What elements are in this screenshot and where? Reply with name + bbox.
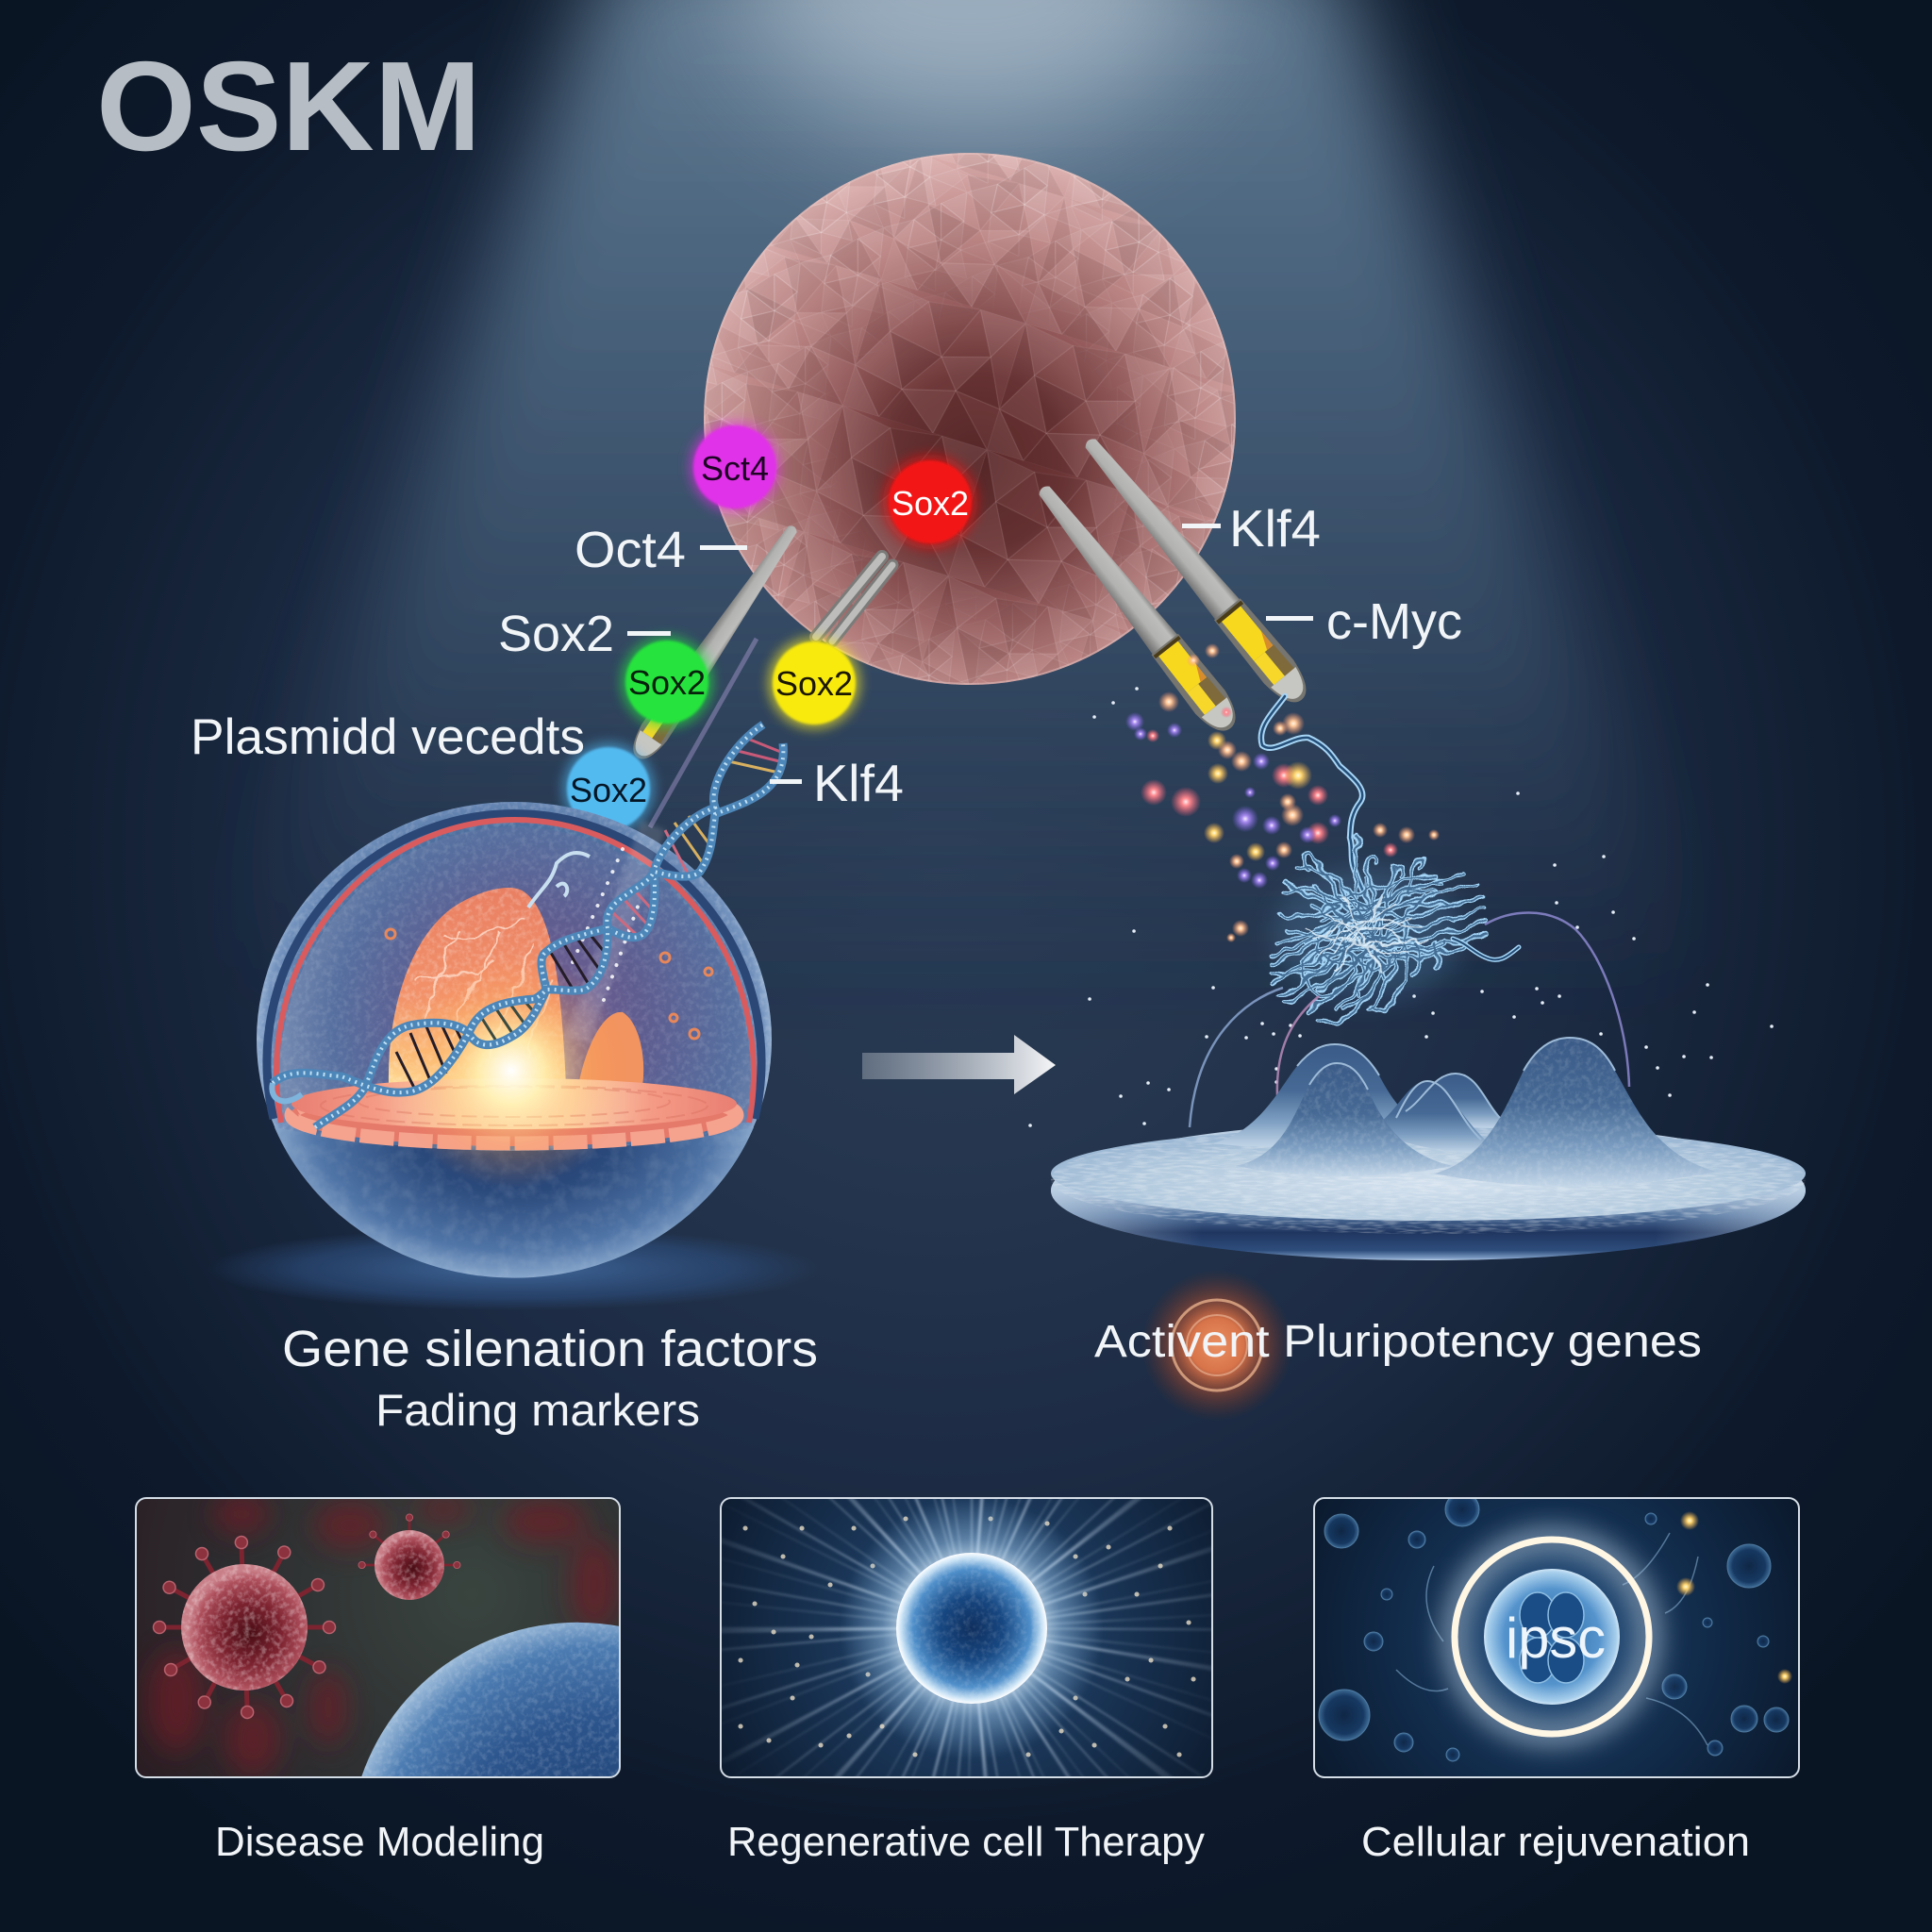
factor sphere: red Sox2: [883, 455, 977, 549]
nucleus texture: [389, 888, 566, 1087]
label: Klf4 lower: [770, 754, 904, 812]
outer shell: [257, 802, 772, 1277]
lower bowl: [275, 1127, 754, 1278]
cell lobes: [1520, 1592, 1584, 1683]
fibre tangle: [1273, 835, 1486, 1023]
factor sphere: yellow Sox2: Sox2: [775, 664, 853, 703]
peak back centre: [1406, 1074, 1509, 1128]
helix tail: [272, 1083, 302, 1101]
needles: twin Sox2 delivery: [816, 557, 892, 641]
peak front left: [1236, 1063, 1453, 1176]
sparkle trail: [573, 849, 641, 1000]
bowl texture: [275, 1127, 754, 1278]
tangled chromatin fibres: [1273, 835, 1519, 1023]
needle: Klf4 lower: [1027, 476, 1245, 740]
helix strand one: [315, 724, 763, 1127]
caption: regenerative cell therapy: Regenerative cell Therapy: [727, 1819, 1205, 1865]
iPSC label: ipsc: [1506, 1607, 1606, 1670]
panel 1 backdrop: [136, 1498, 620, 1777]
large virus: [153, 1536, 336, 1719]
plate side: [290, 1084, 739, 1146]
connecting arcs: [1190, 913, 1629, 1127]
panel 3 frame: [1314, 1498, 1799, 1777]
floor glow under somatic cell: [208, 1227, 821, 1310]
factor sphere: blue Sox2: Sox2: [570, 771, 647, 809]
label: Klf4 lower: Klf4: [813, 754, 904, 812]
factor sphere: red Sox2: Sox2: [891, 484, 969, 523]
label: Klf4 upper: Klf4: [1229, 499, 1321, 558]
disc surface texture: [1051, 1124, 1806, 1234]
label: Oct4: Oct4: [575, 522, 686, 578]
somatic cell cross-section: [257, 802, 772, 1278]
factor sphere: green Sox2: [621, 636, 713, 728]
caption: fading markers: Fading markers: [375, 1385, 700, 1435]
plate cell lines: [321, 1086, 708, 1125]
label: c-Myc: c-Myc: [1326, 593, 1462, 650]
factor sphere: green Sox2: Sox2: [628, 663, 706, 702]
cell halo: [840, 1496, 1104, 1760]
central glow: [393, 953, 629, 1189]
light shaft through cell: [566, 821, 665, 1042]
panel: cellular rejuvenation: [1314, 1492, 1799, 1777]
panel 1 frame: [136, 1498, 620, 1777]
light streak to nucleus: [650, 639, 757, 827]
nucleus DNA hook: [528, 853, 590, 908]
floating bubbles: [1319, 1492, 1789, 1761]
panel: regenerative therapy: [721, 1487, 1212, 1777]
label: Plasmidd vecedts: Plasmidd vecedts: [191, 709, 585, 765]
DNA double helix: [272, 724, 783, 1127]
peak ridge highlights: [1297, 1038, 1615, 1140]
spotlight beam: [236, 0, 1698, 991]
peak centre: [1370, 1081, 1502, 1153]
panel: disease modeling: [136, 1493, 620, 1777]
peak back left: [1212, 1044, 1424, 1147]
thin filaments: [1396, 1533, 1707, 1745]
needle: Klf4 upper / c-Myc: [1074, 428, 1316, 711]
plate blocks: [291, 1087, 737, 1143]
panel 2 frame: [721, 1498, 1212, 1777]
process arrow: [862, 1035, 1056, 1094]
fibre glow: [1274, 868, 1462, 1000]
blue host cell: [361, 1623, 620, 1777]
factor sphere: blue Sox2: [562, 742, 655, 835]
disc edge light: [1051, 1121, 1806, 1260]
fibre tail: [1453, 939, 1519, 959]
label: Sox2: Sox2: [498, 606, 614, 662]
title: OSKM: [96, 35, 481, 177]
disc top surface: [1051, 1126, 1806, 1221]
label: Oct4: [575, 522, 747, 578]
label: c-Myc: [1266, 593, 1462, 650]
label: Klf4 upper: [1182, 499, 1321, 558]
caption: disease modeling: Disease Modeling: [215, 1819, 544, 1865]
needle: Oct4 delivery: [625, 518, 807, 766]
cell interior: [279, 827, 751, 1123]
faceted target cell: [704, 153, 1236, 685]
unwinding fibre strand: [1261, 696, 1368, 901]
red membrane: [276, 820, 754, 1123]
disc underside: [1051, 1121, 1806, 1260]
blurred red blood cells: [148, 1493, 619, 1776]
peak right tall: [1434, 1038, 1717, 1187]
nucleus veins: [415, 920, 552, 1057]
caption: cellular rejuvenation: Cellular rejuvenation: [1361, 1819, 1750, 1865]
nucleus small mass: [577, 1012, 643, 1091]
factor sphere: yellow Sox2: [768, 637, 860, 729]
orange orb: [1141, 1270, 1292, 1421]
peak front left texture: [1236, 1063, 1453, 1176]
shell dark band: [267, 814, 761, 1119]
radial light rays: [830, 1487, 1113, 1770]
peak right texture: [1434, 1038, 1717, 1187]
small organelles: [386, 929, 712, 1039]
interior texture: [279, 827, 751, 1123]
small virus: [358, 1514, 460, 1600]
plate top: [291, 1078, 737, 1129]
ring glow: [1455, 1540, 1649, 1734]
helix rungs: [396, 738, 783, 1091]
shell texture: [257, 802, 772, 1277]
panel 3 backdrop: [1314, 1498, 1799, 1777]
epigenetic landscape disc: [1051, 1038, 1806, 1260]
caption: gene silenation factors: Gene silenation factors: [282, 1321, 818, 1377]
scattered white stars: [1030, 689, 1772, 1125]
nucleus large mass: [389, 888, 566, 1087]
helix strand two: [273, 743, 783, 1092]
coloured particle cloud: [1125, 643, 1440, 942]
central stem cell: [896, 1553, 1047, 1704]
iPSC cell: [1484, 1569, 1620, 1705]
gold sparks: [1676, 1511, 1792, 1684]
iPSC glowing ring: [1455, 1540, 1649, 1734]
label: Sox2: [498, 606, 671, 662]
fibre bright core: [1307, 896, 1429, 972]
cell texture: [898, 1555, 1045, 1702]
factor sphere: magenta Sct4: Sct4: [701, 449, 769, 488]
star specks: [741, 1519, 1193, 1755]
panel 2 backdrop: [721, 1498, 1212, 1777]
factor sphere: magenta Sct4: [690, 422, 780, 512]
caption: activent pluripotency genes: Activent Pluripotency genes: [1094, 1317, 1702, 1367]
